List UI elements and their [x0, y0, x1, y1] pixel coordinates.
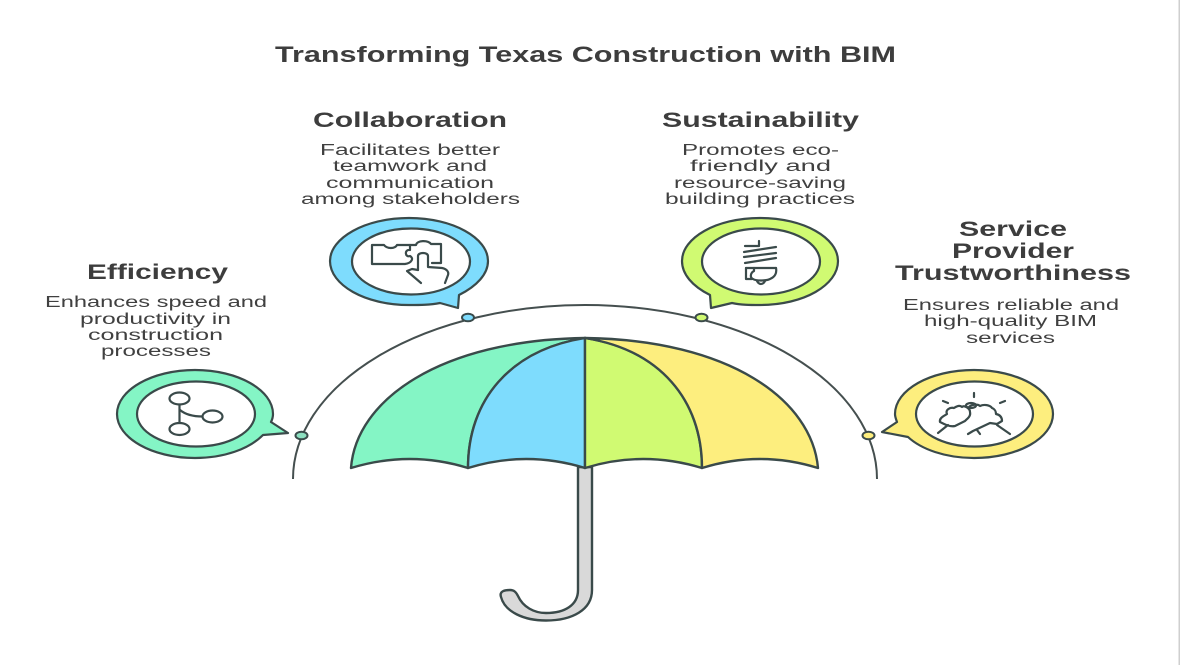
- icon: light bulb: [744, 241, 776, 284]
- sustainability bubble centre: [702, 228, 820, 294]
- efficiency description: processes: [101, 343, 211, 360]
- panel: efficiency: [45, 261, 288, 458]
- connector dot: trustworthiness: [862, 432, 874, 439]
- canopy panel: trustworthiness yellow: [585, 338, 818, 468]
- sustainability description: resource-saving: [674, 175, 846, 192]
- efficiency speech bubble: [117, 370, 288, 458]
- collaboration description: communication: [326, 175, 494, 192]
- efficiency description: construction: [88, 327, 223, 344]
- title: Transforming Texas Construction with BIM: [275, 42, 896, 67]
- efficiency heading: Efficiency: [87, 261, 228, 284]
- trustworthiness heading: Provider: [952, 240, 1074, 263]
- sustainability description: friendly and: [690, 158, 831, 175]
- icon: fist bump: [938, 393, 1010, 434]
- trustworthiness description: Ensures reliable and: [903, 297, 1119, 314]
- outer arc above umbrella: [293, 305, 877, 479]
- umbrella: [351, 338, 818, 620]
- collaboration description: Facilitates better: [320, 142, 500, 159]
- canopy panel: sustainability lime: [585, 338, 702, 468]
- collaboration bubble centre: [352, 228, 470, 294]
- efficiency bubble centre: [137, 382, 255, 446]
- trustworthiness heading: [895, 218, 1131, 285]
- panel: service provider trustworthiness: [882, 218, 1131, 458]
- trustworthiness heading: Trustworthiness: [895, 262, 1131, 285]
- connector dot: collaboration: [462, 314, 474, 321]
- connector dot: efficiency: [296, 432, 308, 439]
- sustainability description: Promotes eco-: [682, 142, 839, 159]
- collaboration heading: Collaboration: [313, 109, 507, 132]
- icon: puzzle and hand: [372, 241, 448, 283]
- sustainability heading: Sustainability: [662, 109, 859, 132]
- sustainability description: building practices: [665, 191, 855, 208]
- trustworthiness description: [903, 297, 1119, 347]
- collaboration description: among stakeholders: [301, 191, 520, 208]
- collaboration description: teamwork and: [333, 158, 487, 175]
- trustworthiness speech bubble: [882, 370, 1053, 458]
- trustworthiness bubble centre: [916, 382, 1033, 446]
- trustworthiness description: high-quality BIM: [924, 313, 1097, 330]
- sustainability description: [665, 142, 855, 208]
- collaboration speech bubble: [330, 218, 488, 308]
- trustworthiness description: services: [966, 330, 1055, 347]
- efficiency description: productivity in: [80, 311, 231, 328]
- canopy panel: collaboration blue: [468, 338, 585, 468]
- sustainability speech bubble: [682, 218, 838, 308]
- efficiency description: Enhances speed and: [45, 294, 267, 311]
- collaboration description: [301, 142, 520, 208]
- canopy panel: efficiency green: [351, 338, 585, 468]
- icon: branching nodes: [170, 392, 222, 435]
- panel: collaboration: [301, 109, 520, 308]
- efficiency description: [45, 294, 267, 360]
- connector dot: sustainability: [696, 314, 708, 321]
- umbrella handle: [501, 467, 592, 620]
- panel: sustainability: [662, 109, 859, 308]
- trustworthiness heading: Service: [959, 218, 1067, 241]
